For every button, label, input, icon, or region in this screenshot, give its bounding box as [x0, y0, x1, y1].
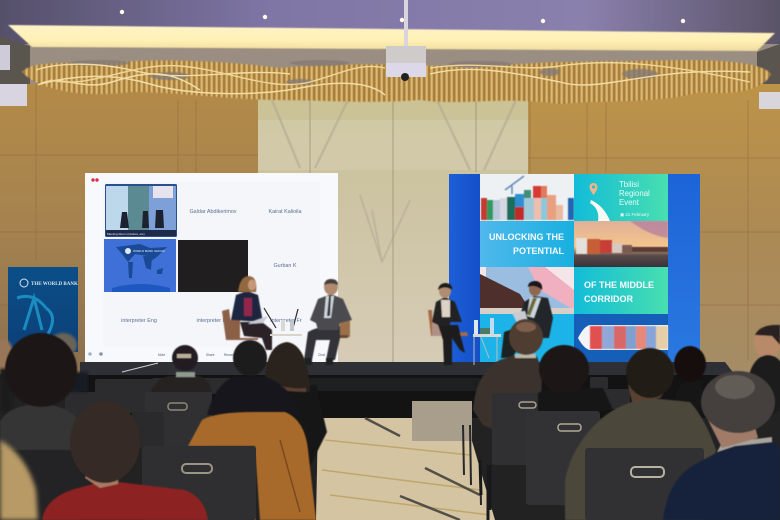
illuminated cove	[8, 25, 775, 51]
middle chair	[145, 392, 212, 446]
tile: headline part one	[480, 221, 574, 267]
microphones and side table	[264, 308, 302, 336]
event name: Tbilisi	[619, 180, 639, 189]
chair row 2	[488, 411, 600, 520]
call toolbar	[88, 352, 325, 357]
back row chairs	[65, 378, 304, 448]
stage	[80, 362, 735, 520]
front chair centre	[142, 446, 256, 520]
name 5: interpreter Ru	[197, 318, 229, 324]
video tile: black feed	[178, 240, 248, 292]
speaker 2: man in grey suit	[304, 279, 352, 365]
call toolbar: Share	[206, 353, 215, 357]
name 6: interpreter Fr	[270, 318, 302, 324]
tile: event title	[574, 174, 668, 221]
event name	[619, 180, 650, 207]
room background	[0, 0, 780, 374]
legs	[304, 326, 340, 360]
name 1: Galdar Abdikerimov	[189, 209, 237, 215]
jacket	[231, 291, 263, 322]
jacket	[518, 296, 553, 338]
audience left block	[0, 333, 327, 520]
event date: ▣ 21 February	[620, 212, 650, 217]
tile: rail freight	[480, 267, 574, 314]
tan coat over chair	[188, 412, 316, 520]
man in navy suit	[663, 371, 780, 520]
head	[439, 284, 451, 298]
left blue column	[449, 174, 480, 362]
ceiling	[0, 0, 780, 60]
tile: trucks at sunset	[574, 221, 668, 267]
document	[248, 316, 268, 324]
gold ribbons	[38, 74, 625, 118]
red window dots	[91, 178, 99, 182]
person: dark jacket	[207, 340, 302, 415]
event name: Regional	[619, 189, 650, 198]
crystal fringe	[22, 60, 771, 104]
left projector	[0, 45, 27, 106]
tile: headline part one: POTENTIAL	[513, 246, 565, 256]
left wood wall	[0, 84, 258, 374]
right blue column	[668, 174, 700, 362]
person in gray, behind	[49, 333, 77, 357]
gaps showing ceiling	[70, 60, 658, 85]
call toolbar: Chat	[318, 353, 325, 357]
tile caption: Meeting Room (Culture, etc)	[107, 232, 145, 236]
chair row 1	[480, 393, 544, 510]
tile: headline part two	[574, 267, 668, 314]
audience right block	[463, 319, 780, 520]
right wood wall	[528, 84, 780, 374]
side table with bottles	[473, 318, 501, 365]
man in brown jacket	[565, 348, 716, 520]
name 2: Kairat Kalioila	[269, 209, 301, 215]
tile: headline part two: CORRIDOR	[584, 294, 633, 304]
tile: plain cyan	[480, 314, 574, 362]
icon: globe	[17, 296, 53, 334]
head and hair	[238, 276, 256, 292]
document	[512, 311, 528, 323]
chair row 3	[585, 448, 704, 520]
video tile: World Bank Group map	[104, 239, 176, 292]
man with face visible at edge	[748, 325, 780, 415]
World Bank banner	[8, 267, 78, 352]
logo text: THE WORLD BANK	[31, 282, 78, 287]
person: blonde foreground	[0, 440, 38, 520]
person: long dark hair	[262, 342, 327, 470]
person: cap	[150, 345, 212, 393]
call toolbar: Record	[224, 353, 235, 357]
jacket	[432, 297, 462, 326]
icon: map pin and road	[590, 183, 610, 221]
ceiling projectors	[0, 0, 780, 109]
chair back	[340, 320, 350, 337]
person: curly hair	[0, 333, 78, 450]
tile: headline part one: UNLOCKING THE	[489, 232, 564, 242]
woman with curly hair	[538, 345, 613, 412]
name 4: interpreter Eng	[121, 318, 157, 324]
chandelier	[22, 60, 771, 118]
stage skirt	[80, 375, 735, 418]
video tile: room feed	[105, 184, 177, 237]
man in brown suit	[473, 319, 543, 430]
back chairs	[590, 377, 630, 409]
speaker 3: woman in black	[428, 283, 468, 365]
speaker 4: man in dark suit	[501, 281, 553, 358]
legs	[438, 325, 465, 365]
chair	[222, 309, 258, 340]
carpet	[316, 418, 495, 520]
person far left	[0, 339, 88, 413]
skirt and legs	[240, 322, 272, 350]
name 3: Gurban K	[273, 263, 297, 269]
screen panel	[85, 173, 338, 362]
jacket	[310, 294, 352, 330]
centre projector	[386, 0, 426, 81]
tile: containers	[480, 174, 574, 221]
right LED screen: event slide	[449, 174, 700, 362]
tile: headline part two: OF THE MIDDLE	[584, 280, 654, 290]
panel speakers	[222, 276, 553, 365]
tile: container ship	[574, 314, 668, 362]
participant names	[121, 209, 302, 324]
front chair left	[22, 452, 84, 520]
marble veins	[272, 98, 516, 262]
speaker 1: woman in navy	[222, 276, 272, 350]
woman with bun	[674, 346, 706, 412]
marble centre wall	[258, 95, 528, 365]
stage top	[80, 362, 735, 375]
map caption: WORLD BANK GROUP	[133, 249, 165, 253]
person: red jacket	[42, 401, 208, 520]
wall panel seams	[0, 84, 780, 360]
ceiling spotlights	[120, 10, 685, 23]
head	[324, 279, 338, 295]
chair	[428, 310, 468, 336]
soffit behind chandelier	[0, 44, 780, 96]
chair beside red jacket	[133, 412, 164, 448]
legs	[501, 325, 550, 358]
left LED screen: video call	[85, 173, 338, 362]
call toolbar: Mute	[158, 353, 165, 357]
event name: Event	[619, 198, 640, 207]
right projector	[759, 92, 780, 109]
chair frame on carpet	[463, 425, 481, 505]
floor box	[412, 401, 472, 441]
head	[529, 282, 541, 296]
